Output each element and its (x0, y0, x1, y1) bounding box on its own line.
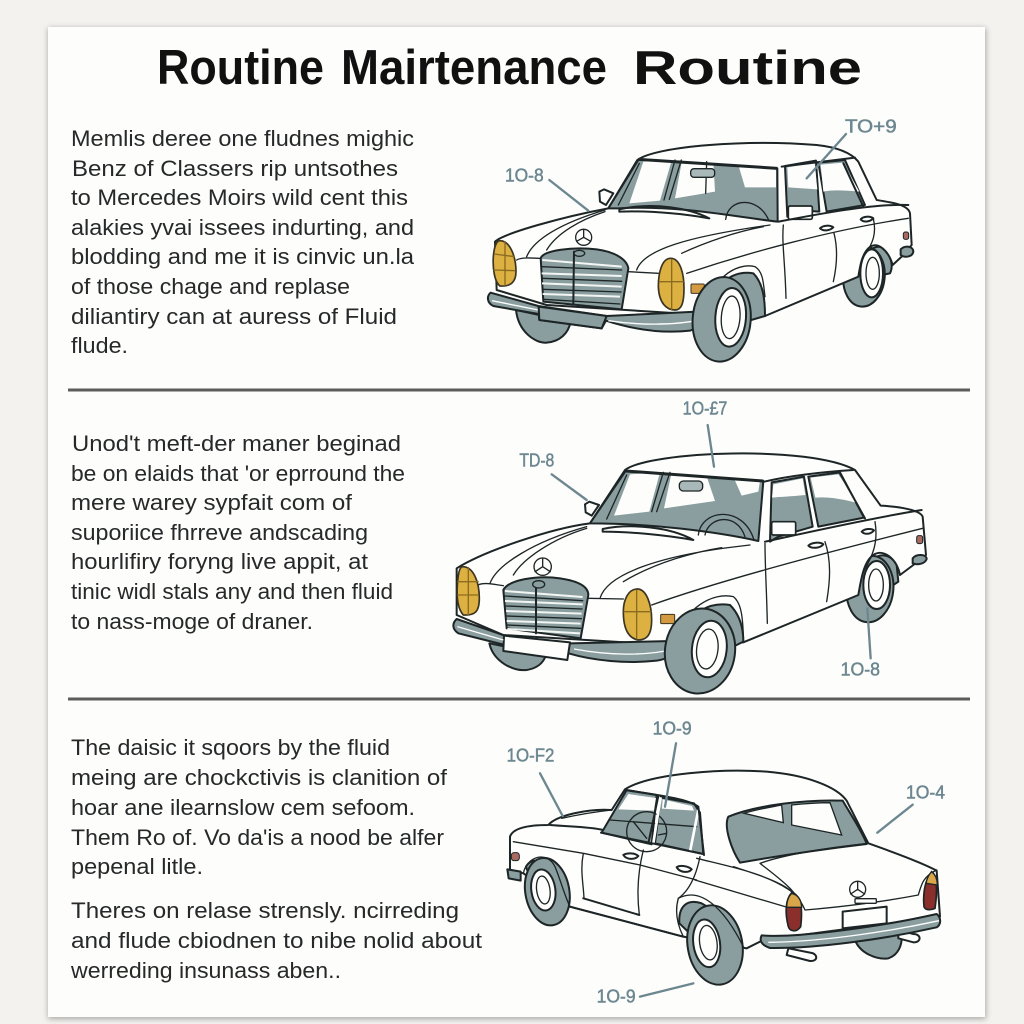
front wheel (689, 266, 765, 364)
section 2 text (71, 431, 405, 634)
section 3 text: The daisic it sqoors by the fluid (71, 735, 390, 760)
car illustration 2: front three-quarter view with plate (453, 397, 927, 698)
front wheel (659, 596, 743, 698)
title: Routine (157, 41, 324, 95)
callout: 10-9 bottom: 1O-9 (597, 986, 636, 1007)
divider 2 (68, 698, 970, 700)
section 3 text: pepenal litle. (71, 854, 203, 879)
callout: 10-4: 1O-4 (906, 782, 945, 803)
car illustration 1: front three-quarter view (488, 116, 913, 364)
callout: 10-4 (877, 782, 945, 833)
section 2 text: Unod't meft-der maner beginad (72, 431, 401, 456)
section 3 text: Theres on relase strensly. ncirreding (71, 898, 459, 923)
callout: 10-9 bottom (597, 983, 693, 1007)
section 1 text: diliantiry can at auress of Fluid (71, 304, 397, 329)
title: Mairtenance (341, 41, 607, 95)
section 3 text: hoar ane ilearnslow cem sefoom. (71, 795, 415, 820)
divider 1 (68, 388, 970, 392)
section 2 text: hourlifiry foryng live appit, at (71, 549, 369, 574)
callout: 10-F2 (507, 744, 563, 816)
star emblem (534, 558, 551, 575)
callout: 10-9 top: 1O-9 (653, 718, 692, 739)
section 3 text: Them Ro of. Vo da'is a nood be alfer (71, 825, 445, 850)
section 2 text: tinic widl stals any and then fluid (71, 579, 393, 604)
grille (541, 248, 628, 309)
title: Routine (633, 41, 862, 94)
section 2 text: be on elaids that 'or eprround the (71, 461, 405, 486)
section 1 text: blodding and me it is cinvic un.la (71, 244, 415, 269)
callout: 10-9 top (653, 718, 692, 807)
emblem and plate (843, 881, 887, 928)
title (157, 41, 862, 95)
bumper (761, 914, 940, 948)
callout: 10+9 (807, 116, 897, 178)
callout: D-8: TD-8 (519, 450, 554, 471)
callout: 10-8 (505, 164, 588, 211)
side windows (601, 790, 704, 855)
callout: 10-7: 1O-£7 (683, 397, 727, 418)
star emblem (576, 229, 592, 245)
section 2 text: mere warey sypfait com of (71, 490, 353, 515)
section 2 text: suporiice fhrreve andscading (71, 520, 368, 545)
exhaust pipe (787, 948, 816, 961)
callout: 10-8 lower (841, 608, 880, 680)
section 1 text (71, 126, 415, 358)
grille (503, 577, 588, 638)
car illustration 3: rear three-quarter view (507, 718, 945, 1007)
callout: 10-8: 1O-8 (505, 164, 544, 185)
section 2 text: to nass-moge of draner. (71, 609, 313, 634)
headlights (493, 241, 704, 310)
section 1 text: to Mercedes Moirs wild cent this (71, 185, 408, 210)
section 3 text: meing are chockctivis is clanition of (71, 765, 448, 790)
main wheel (678, 895, 749, 989)
section 3 text: werreding insunass aben.. (70, 958, 341, 983)
tail lights (786, 872, 937, 931)
left rear wheel (520, 854, 575, 929)
callout: D-8 (519, 450, 587, 500)
bumper with plate (453, 619, 675, 662)
section 3 text: and flude cbiodnen to nibe nolid about (71, 928, 483, 953)
section 3 text (70, 735, 483, 983)
section 1 text: Memlis deree one fludnes mighic (71, 126, 414, 151)
section 1 text: of those chage and replase (71, 274, 350, 299)
section 1 text: flude. (71, 333, 128, 358)
section 1 text: alakies yvai issees indurting, and (71, 215, 414, 240)
section 1 text: Benz of Classers rip untsothes (72, 156, 398, 181)
bumper (488, 293, 704, 332)
callout: 10+9: TO+9 (845, 116, 897, 137)
headlights (457, 567, 675, 640)
callout: 10-7 (683, 397, 727, 467)
callout: 10-8 lower: 1O-8 (841, 659, 880, 680)
callout: 10-F2: 1O-F2 (507, 744, 554, 765)
rear window (727, 800, 867, 863)
